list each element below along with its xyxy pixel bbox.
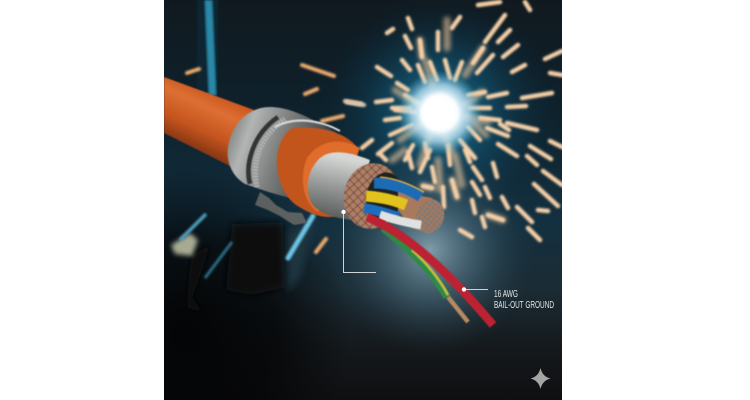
callout label [494, 290, 554, 308]
conductor bundle [364, 177, 448, 236]
orange sleeve [277, 127, 360, 217]
callout label: 16 AWG [494, 288, 518, 300]
callout: ground wire leader [462, 287, 488, 292]
icon: sparkle watermark [530, 368, 550, 389]
stray orange sparks at left [187, 65, 364, 252]
welding sparks [347, 2, 562, 240]
green earth wire [383, 228, 468, 322]
exposed copper strands [448, 297, 468, 322]
yellow wire [366, 196, 406, 205]
welding arc flash [398, 71, 482, 155]
clamp bolt tabs [255, 192, 307, 225]
blue background post [197, 0, 218, 96]
callout: shield leader [341, 210, 376, 272]
strand ends [416, 198, 445, 232]
orange cable jacket [164, 77, 254, 167]
red 16 AWG wire [367, 217, 493, 325]
dark workshop background [164, 0, 562, 400]
stranded copper fan [397, 192, 433, 234]
white wire [380, 215, 421, 225]
blue wire upper [374, 183, 421, 197]
callout label: BAIL-OUT GROUND [494, 299, 554, 311]
photo panel [164, 0, 562, 400]
copper braid [343, 162, 400, 230]
blurred vise on workbench [171, 214, 316, 312]
metal clamp [228, 107, 340, 225]
silver shield [308, 152, 370, 220]
background spark glow [392, 20, 503, 220]
blue wire lower [364, 208, 398, 217]
